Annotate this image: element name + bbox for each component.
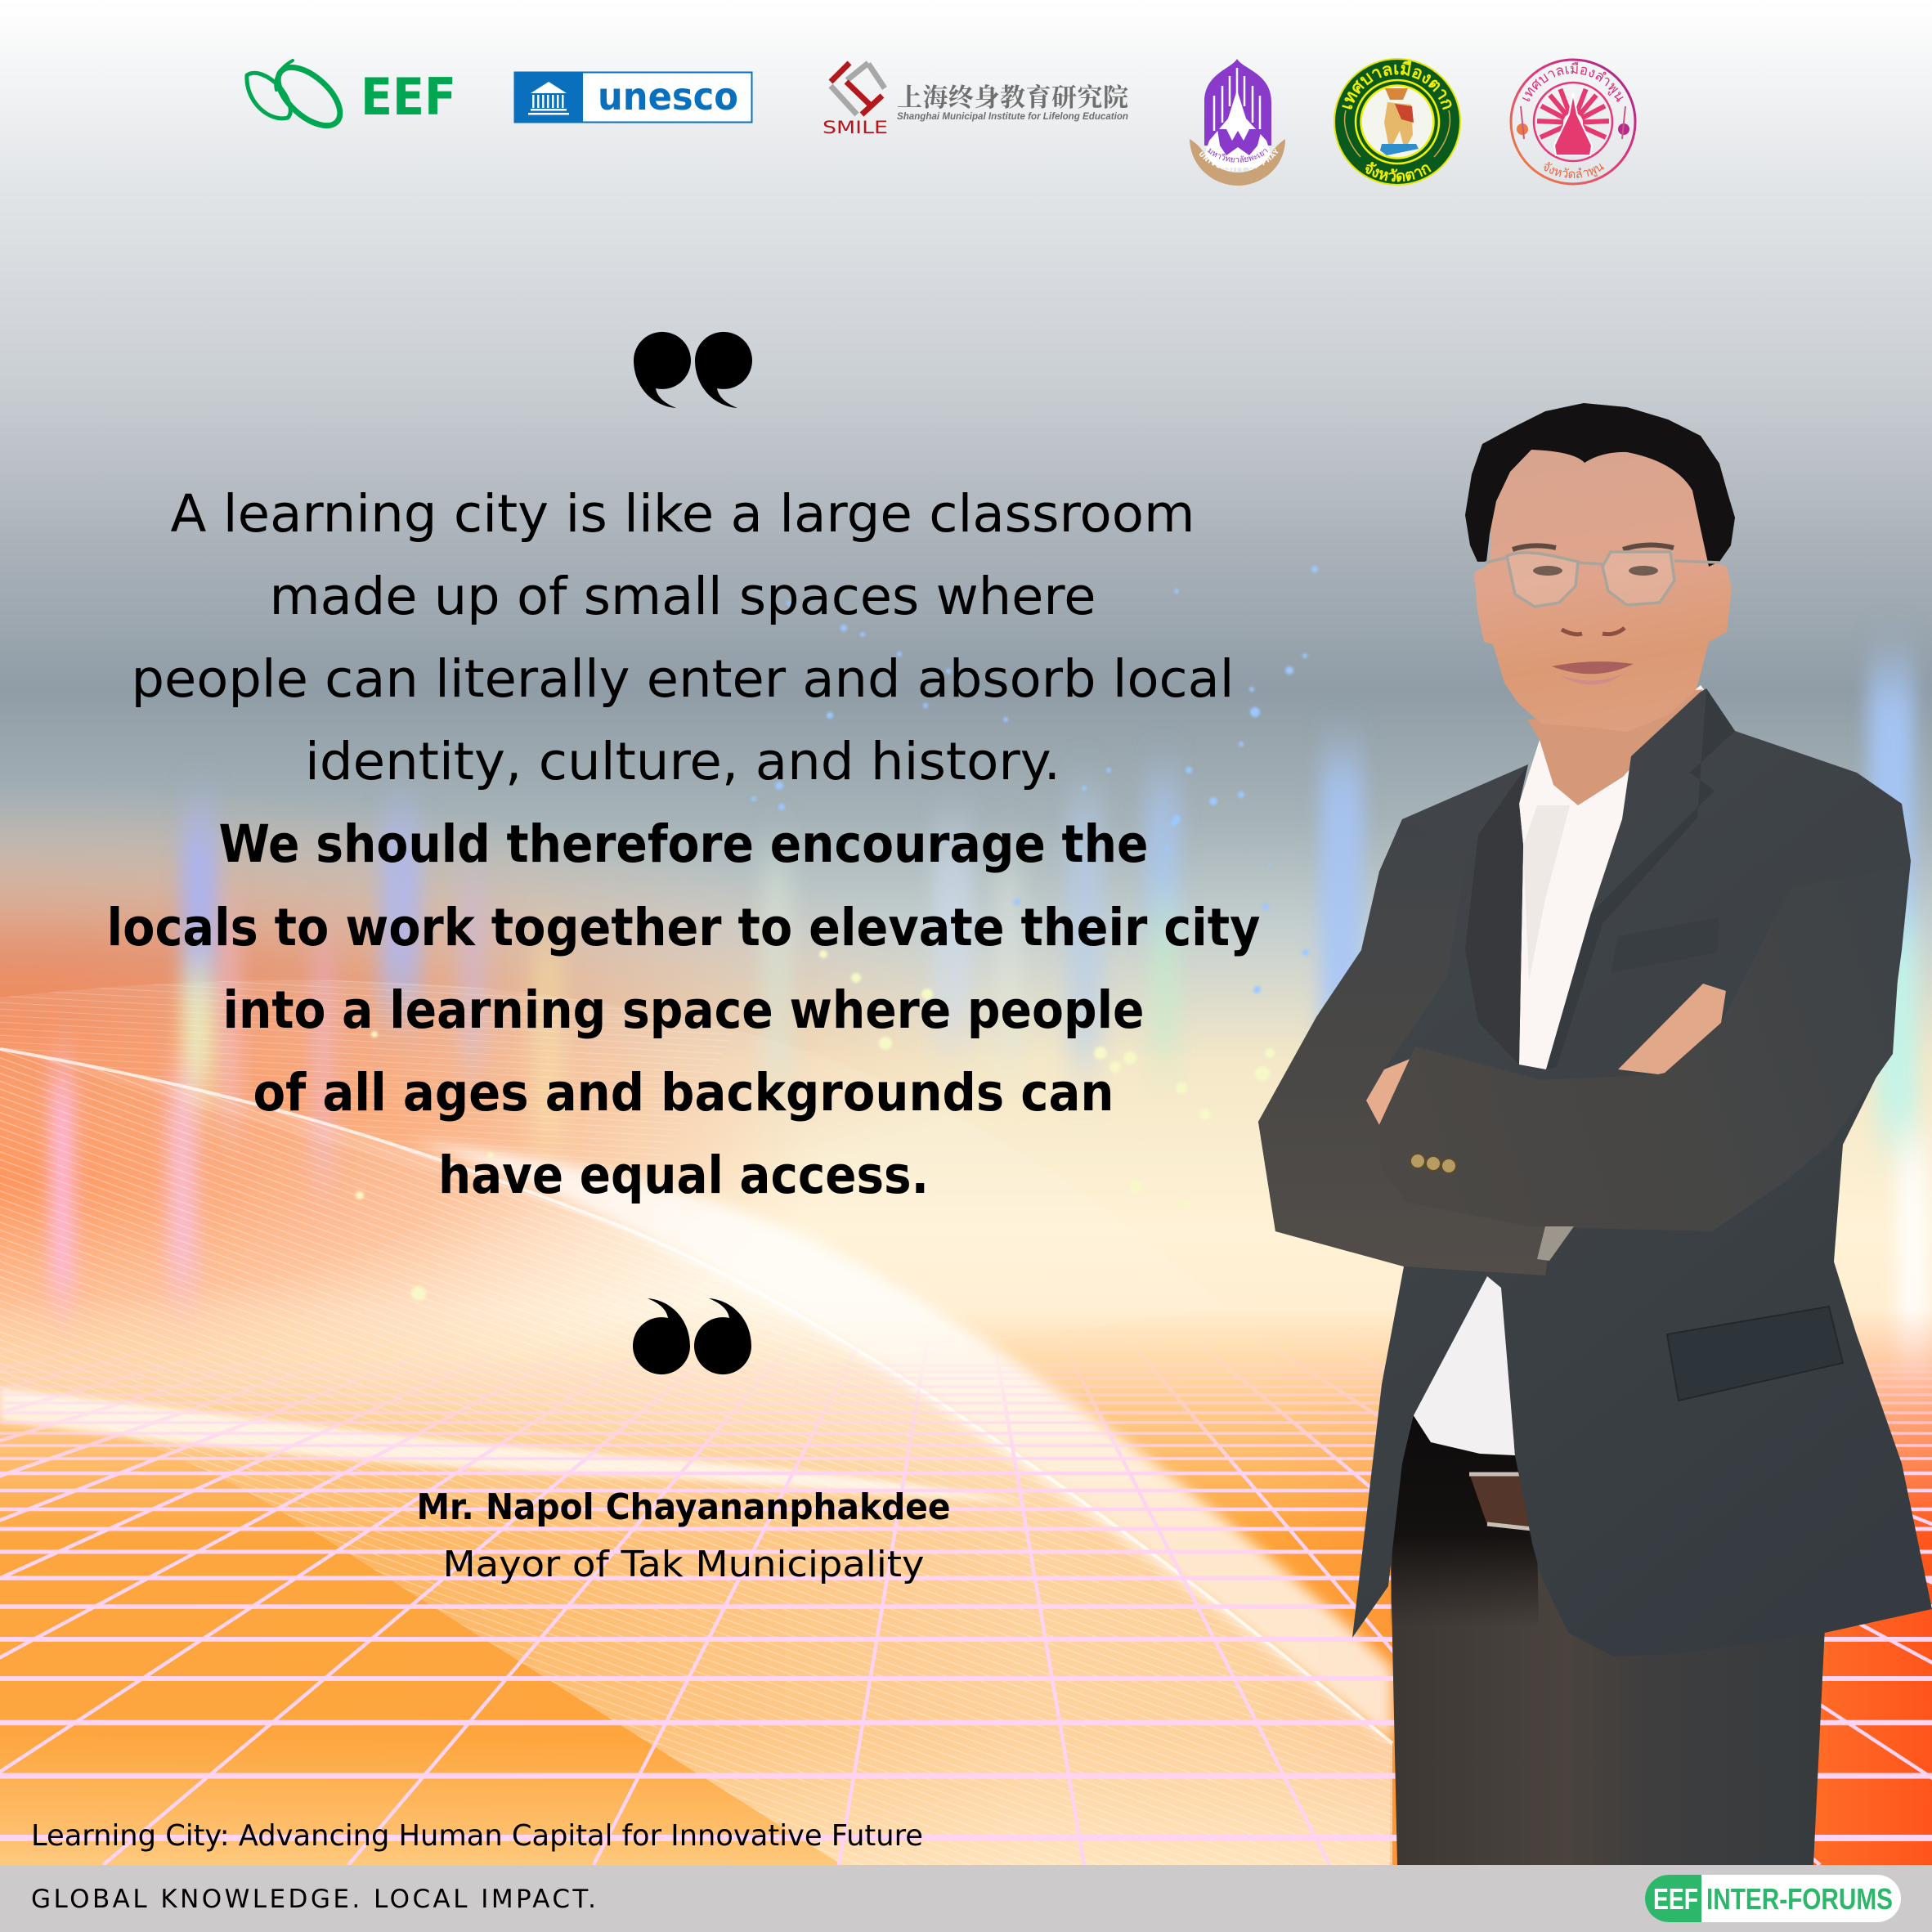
lower shirt: [1413, 1276, 1515, 1455]
jacket lapels: [1465, 688, 1735, 1069]
quote lines regular: A learning city is like a large classroom: [170, 484, 1195, 544]
jacket body: [1258, 688, 1932, 1656]
EEF Inter-Forums badge: INTER-FORUMS: [1706, 1882, 1893, 1916]
logo: Shanghai SMILE: 上海终身教育研究院: [897, 77, 1128, 114]
shirt cuff: [1537, 1226, 1574, 1261]
trousers: [1388, 1455, 1825, 1865]
shirt collar shade: [1523, 805, 1570, 981]
speaker attribution: Mayor of Tak Municipality: [443, 1544, 924, 1585]
EEF butterfly mark: [247, 56, 350, 137]
side ornaments: [1345, 110, 1450, 157]
elephant emblem: [1380, 88, 1419, 155]
logo: Shanghai SMILE: [823, 63, 1128, 137]
quote lines regular: people can literally enter and absorb local: [131, 649, 1235, 709]
EEF wordmark: EEF: [361, 67, 456, 127]
upper shirt: [1519, 685, 1706, 1069]
logo: Lamphun Municipality seal: เทศบาลเมืองลำพูน: [1522, 62, 1624, 102]
closing quotation mark: [633, 1298, 751, 1374]
quote lines bold: into a learning space where people: [222, 980, 1145, 1040]
neck and face: [1474, 425, 1732, 805]
quote lines regular: [131, 484, 1235, 791]
logo: Tak Municipality seal: เทศบาลเมืองตาก: [1342, 61, 1452, 110]
sparkles: [356, 566, 1318, 1301]
hair: [1465, 403, 1735, 567]
EEF Inter-Forums badge: [1645, 1875, 1901, 1922]
portrait of the mayor: [1258, 403, 1932, 1865]
footer tagline: GLOBAL KNOWLEDGE. LOCAL IMPACT.: [31, 1885, 596, 1914]
dark waist shadow: [1390, 1410, 1539, 1627]
quote lines bold: [106, 814, 1261, 1205]
left upper arm and sleeve: [1258, 819, 1553, 1275]
event title: Learning City: Advancing Human Capital for Innovative Future: [31, 1819, 923, 1853]
speaker attribution: Mr. Napol Chayananphakdee: [417, 1486, 950, 1528]
logo: Tak Municipality seal: จังหวัดตาก: [1365, 162, 1432, 182]
speaker attribution: [417, 1486, 950, 1585]
opening quotation mark: [634, 332, 752, 408]
logo: UNESCO: [514, 72, 752, 123]
eyebrows, eyes, nose and mouth: [1513, 545, 1674, 685]
temple icon: [528, 82, 569, 114]
stupa: [1554, 93, 1592, 155]
logo: Tak Municipality seal: [1334, 58, 1461, 186]
crossed forearm: [1378, 867, 1905, 1231]
white wave band: [0, 980, 1392, 1865]
quote lines bold: have equal access.: [438, 1145, 929, 1205]
belt: [1469, 1473, 1532, 1530]
quote lines bold: locals to work together to elevate their city: [106, 898, 1261, 957]
glasses: [1486, 552, 1719, 607]
EEF Inter-Forums badge: EEF: [1653, 1882, 1698, 1916]
upper translucent wave: [0, 980, 1226, 1365]
quote lines regular: made up of small spaces where: [270, 567, 1096, 626]
quote text: [106, 484, 1261, 1205]
footer bar: [0, 1865, 1932, 1932]
chest pocket: [1611, 917, 1719, 973]
logo: Lamphun Municipality seal: จังหวัดลำพูน: [1544, 162, 1604, 178]
logo: EEF: [247, 56, 456, 137]
side flowers: [1517, 106, 1629, 139]
quote lines regular: identity, culture, and history.: [305, 732, 1060, 791]
stupa rays: [1537, 88, 1609, 137]
perspective floor: [0, 1316, 1932, 1865]
hand on sleeve: [1618, 984, 1726, 1074]
logo: Shanghai SMILE: SMILE: [823, 118, 888, 137]
background light stripes: [51, 670, 1930, 1374]
quote lines bold: We should therefore encourage the: [219, 814, 1148, 874]
face: [1474, 425, 1732, 732]
logo: UNESCO: unesco: [598, 74, 738, 119]
quote lines bold: of all ages and backgrounds can: [253, 1063, 1114, 1123]
hand under arm: [1366, 1056, 1416, 1125]
SMILE knot mark: [831, 63, 885, 114]
floor grid lines: [0, 1341, 1932, 1865]
logo: University of Phayao: มหาวิทยาลัยพะเยา: [1208, 149, 1268, 163]
hip pocket flap: [1667, 1307, 1843, 1401]
cuff buttons: [1410, 1154, 1456, 1173]
logo: Shanghai SMILE: Shanghai Municipal Institute for Lifelong Education: [897, 112, 1128, 122]
logo: Lamphun Municipality seal: [1509, 59, 1637, 185]
logo: University of Phayao: [1190, 59, 1285, 186]
spires: [1214, 68, 1260, 131]
